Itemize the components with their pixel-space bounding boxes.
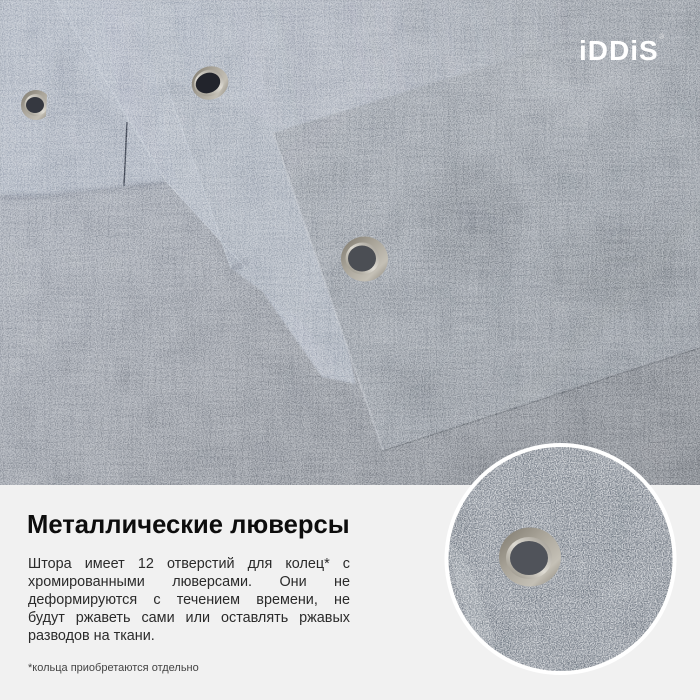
heading: Металлические люверсы	[27, 511, 350, 539]
body text: хромированными люверсами. Они не	[28, 574, 350, 590]
inset: magnified grommet	[444, 443, 677, 676]
panel holding second grommet	[224, 214, 354, 378]
front panel bottom edge shadow	[383, 348, 700, 451]
linen texture horizontal threads	[0, 0, 700, 485]
body text: разводов на ткани.	[28, 628, 155, 644]
left fold flap	[37, 45, 128, 196]
body text: Штора имеет 12 отверстий для колец* с	[28, 556, 350, 572]
inset fabric	[445, 444, 677, 676]
hem slit	[124, 122, 127, 186]
fabric folds	[0, 0, 700, 450]
grommet: main	[341, 236, 388, 282]
inset white ring	[444, 443, 676, 675]
brand logo: ®	[659, 34, 664, 41]
fabric floor layer	[0, 0, 700, 485]
body text: будут ржаветь сами или оставлять ржавых	[28, 610, 350, 626]
linen texture fine grain	[0, 0, 700, 485]
front panel soft shading	[394, 66, 681, 400]
front panel left edge highlight	[273, 133, 383, 450]
bright top fold edges	[57, 0, 246, 268]
body text	[28, 556, 350, 644]
body text: деформируются с течением времени, не	[28, 592, 350, 608]
linen texture vertical threads	[0, 0, 700, 485]
back fabric upper left	[0, 0, 165, 197]
footnote: *кольца приобретаются отдельно	[28, 662, 199, 674]
inset grommet	[499, 528, 561, 586]
diagonal hem panel	[71, 0, 568, 384]
grommet: top	[192, 66, 228, 100]
shadow below upper folds	[0, 183, 248, 268]
mottled shading	[0, 0, 700, 485]
grommet: left, partly hidden	[21, 90, 47, 120]
photo: folded grey curtain fabric	[0, 0, 700, 485]
brand logo: iDDiS	[579, 35, 659, 66]
front fabric panel	[273, 0, 700, 450]
